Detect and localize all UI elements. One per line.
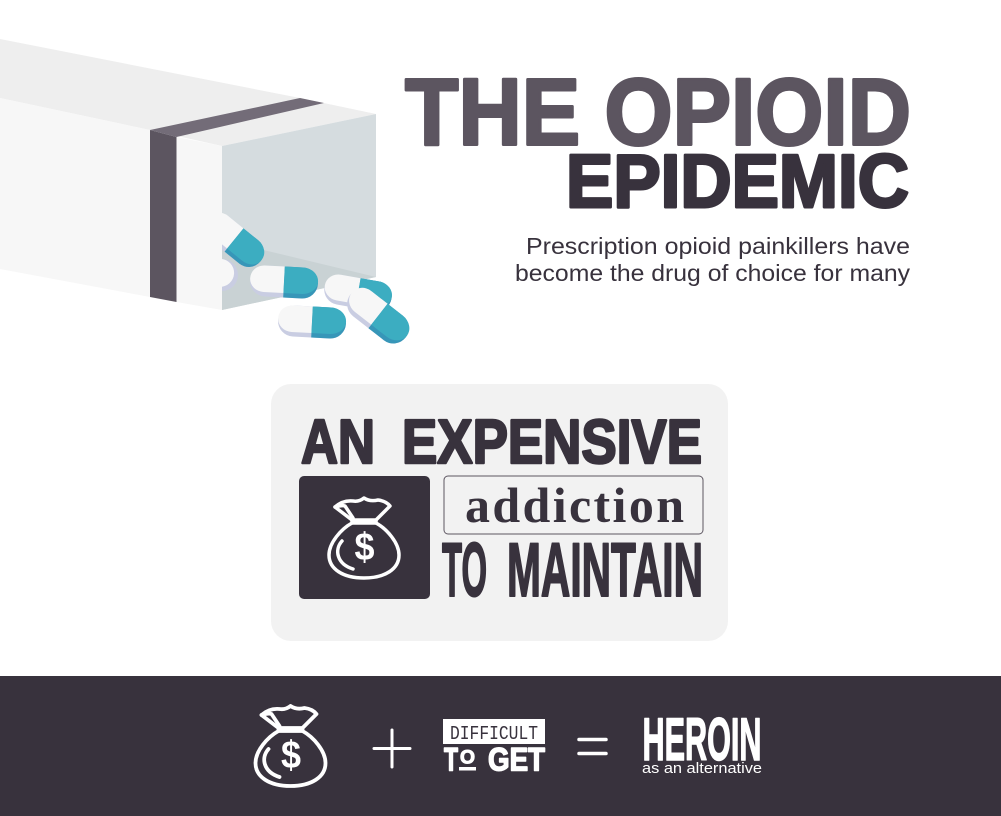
heading: to maintain: TO [442, 528, 487, 613]
box top face [0, 39, 376, 146]
heading: an expensive: AN [301, 408, 375, 477]
subtitle [515, 233, 911, 286]
pill: right back [322, 272, 394, 314]
illustration: open pill box [0, 39, 415, 350]
icon: money bag: $ [281, 734, 301, 777]
heading: to maintain: MAINTAIN [507, 528, 703, 613]
icon tile: money bag [299, 476, 430, 599]
caption: as an alternative: as an alternative [642, 761, 762, 777]
title line 2: EPIDEMIC [566, 139, 909, 223]
label: to get: GET [488, 742, 545, 778]
label: to get [444, 742, 545, 778]
title [405, 60, 911, 223]
heading: an expensive: EXPENSIVE [402, 408, 702, 477]
heading: heroin: HEROIN [642, 706, 762, 773]
icon: equals [579, 740, 606, 754]
heading: heroin [642, 706, 762, 777]
pill: bottom [277, 305, 347, 339]
pill: centre [249, 265, 319, 299]
heading: to maintain [442, 528, 703, 613]
panel: expensive addiction [271, 384, 728, 641]
pill: right front [341, 282, 415, 350]
heading: an expensive [301, 408, 702, 477]
box side face [0, 98, 150, 297]
footer band [0, 676, 1001, 816]
label: difficult: DIFFICULT [450, 723, 538, 745]
subtitle: become the drug of choice for many [515, 260, 911, 286]
box ribbon [150, 98, 324, 302]
label: addiction: addiction [465, 477, 684, 533]
icon: money bag: $ [354, 526, 375, 569]
subtitle: Prescription opioid painkillers have [526, 233, 910, 259]
icon: plus [374, 730, 410, 767]
box front flap [176, 137, 222, 310]
pills inside the box [222, 213, 264, 291]
title line 1: THE OPIOID [405, 60, 911, 166]
icon: money bag [256, 706, 326, 786]
label: to get: O [460, 748, 475, 768]
label: to get: T [444, 742, 458, 778]
box interior [222, 114, 376, 310]
